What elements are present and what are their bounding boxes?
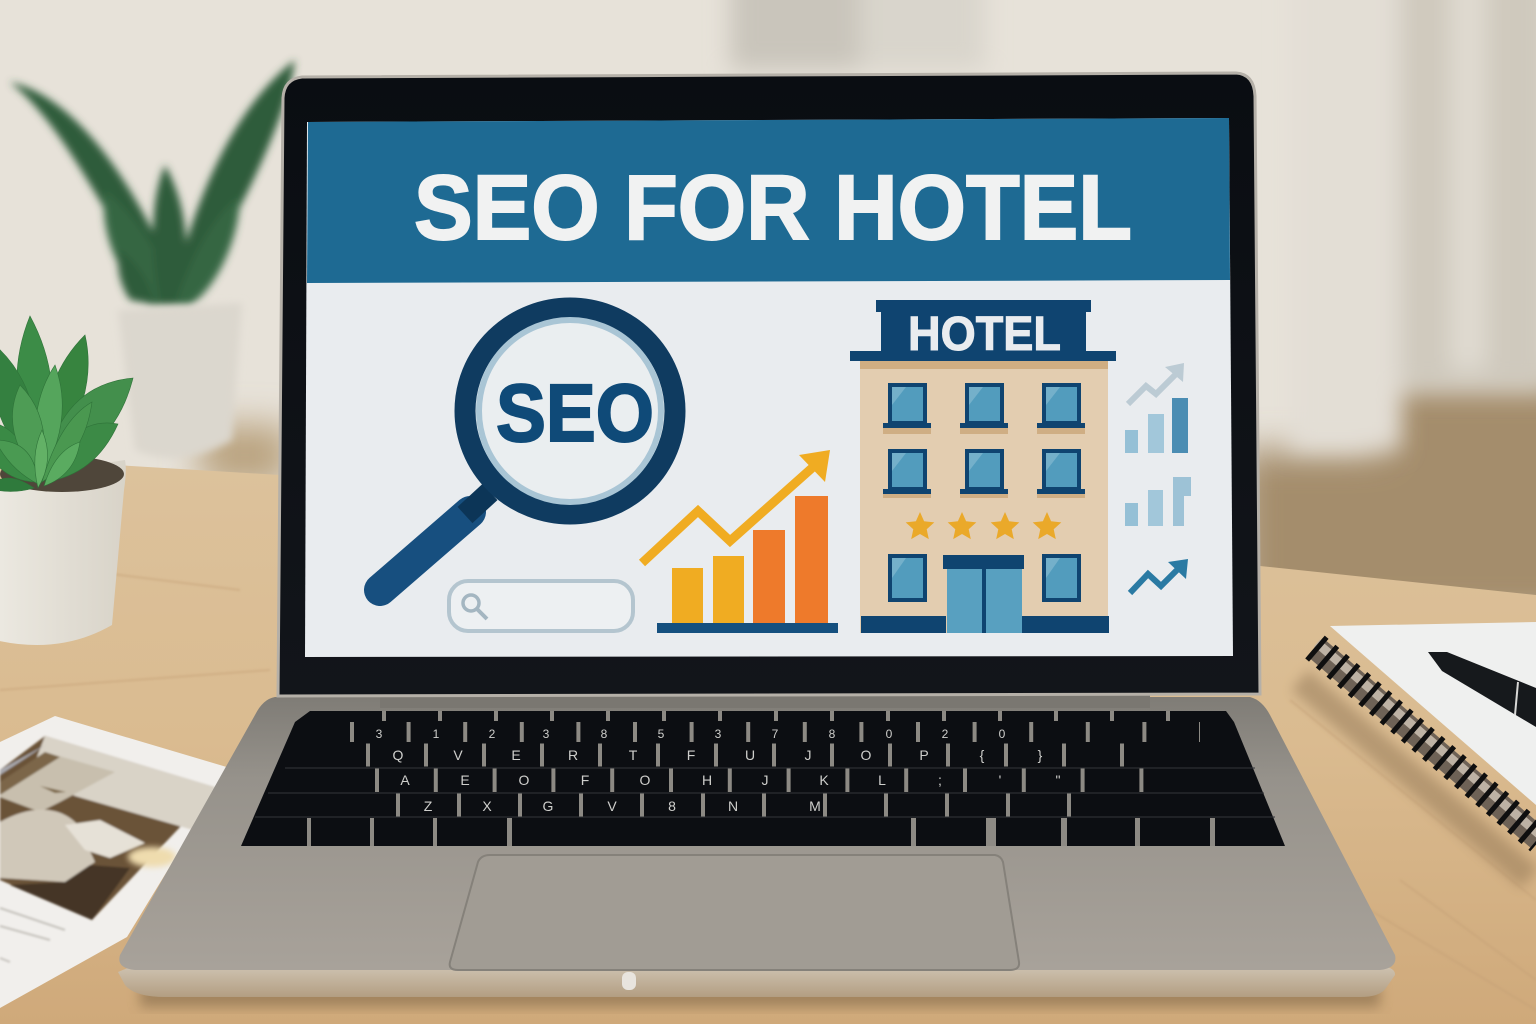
screen — [305, 118, 1233, 657]
succulent in white pot — [0, 316, 133, 645]
spiral notebook with pen — [1300, 622, 1536, 878]
keyboard — [241, 711, 1285, 846]
brochure caption lines — [0, 908, 65, 962]
SEO label: SEO — [496, 368, 654, 459]
background plant — [10, 60, 295, 458]
brochure photo — [0, 736, 217, 920]
search bar — [449, 581, 633, 631]
desk surface — [0, 458, 1536, 1024]
key labels: 312385378020 — [376, 727, 1006, 741]
key labels — [376, 727, 1061, 814]
pen — [1428, 652, 1536, 727]
hotel building — [850, 300, 1116, 633]
icon: magnifying glass with SEO — [380, 308, 675, 590]
hotel sign: HOTEL — [908, 308, 1061, 361]
laptop shadow — [140, 985, 1380, 1007]
trackpad — [450, 855, 1019, 970]
arrow — [642, 450, 830, 563]
bar chart with rising arrow — [642, 450, 838, 633]
laptop base — [118, 694, 1395, 997]
key labels: QVERTFUJOP{} — [393, 747, 1043, 763]
front notch — [622, 972, 636, 990]
title: SEO FOR HOTEL — [414, 157, 1132, 259]
laptop lid — [278, 73, 1260, 696]
key labels: AEOFOHJKL;'" — [400, 772, 1061, 788]
entrance — [861, 555, 1109, 633]
side icons: small charts — [1125, 363, 1191, 593]
hinge — [380, 694, 1150, 708]
hotel sign — [850, 300, 1116, 361]
stars — [906, 512, 1061, 539]
windows — [890, 385, 1079, 600]
key labels: ZXGV8NM — [424, 798, 821, 814]
window glints — [892, 387, 1060, 578]
notebook spiral binding — [1315, 643, 1536, 840]
laptop — [118, 73, 1395, 997]
hotel brochure — [0, 716, 230, 1008]
header band — [307, 118, 1230, 283]
window sills — [883, 423, 1085, 494]
background: blurred room — [0, 0, 1536, 620]
